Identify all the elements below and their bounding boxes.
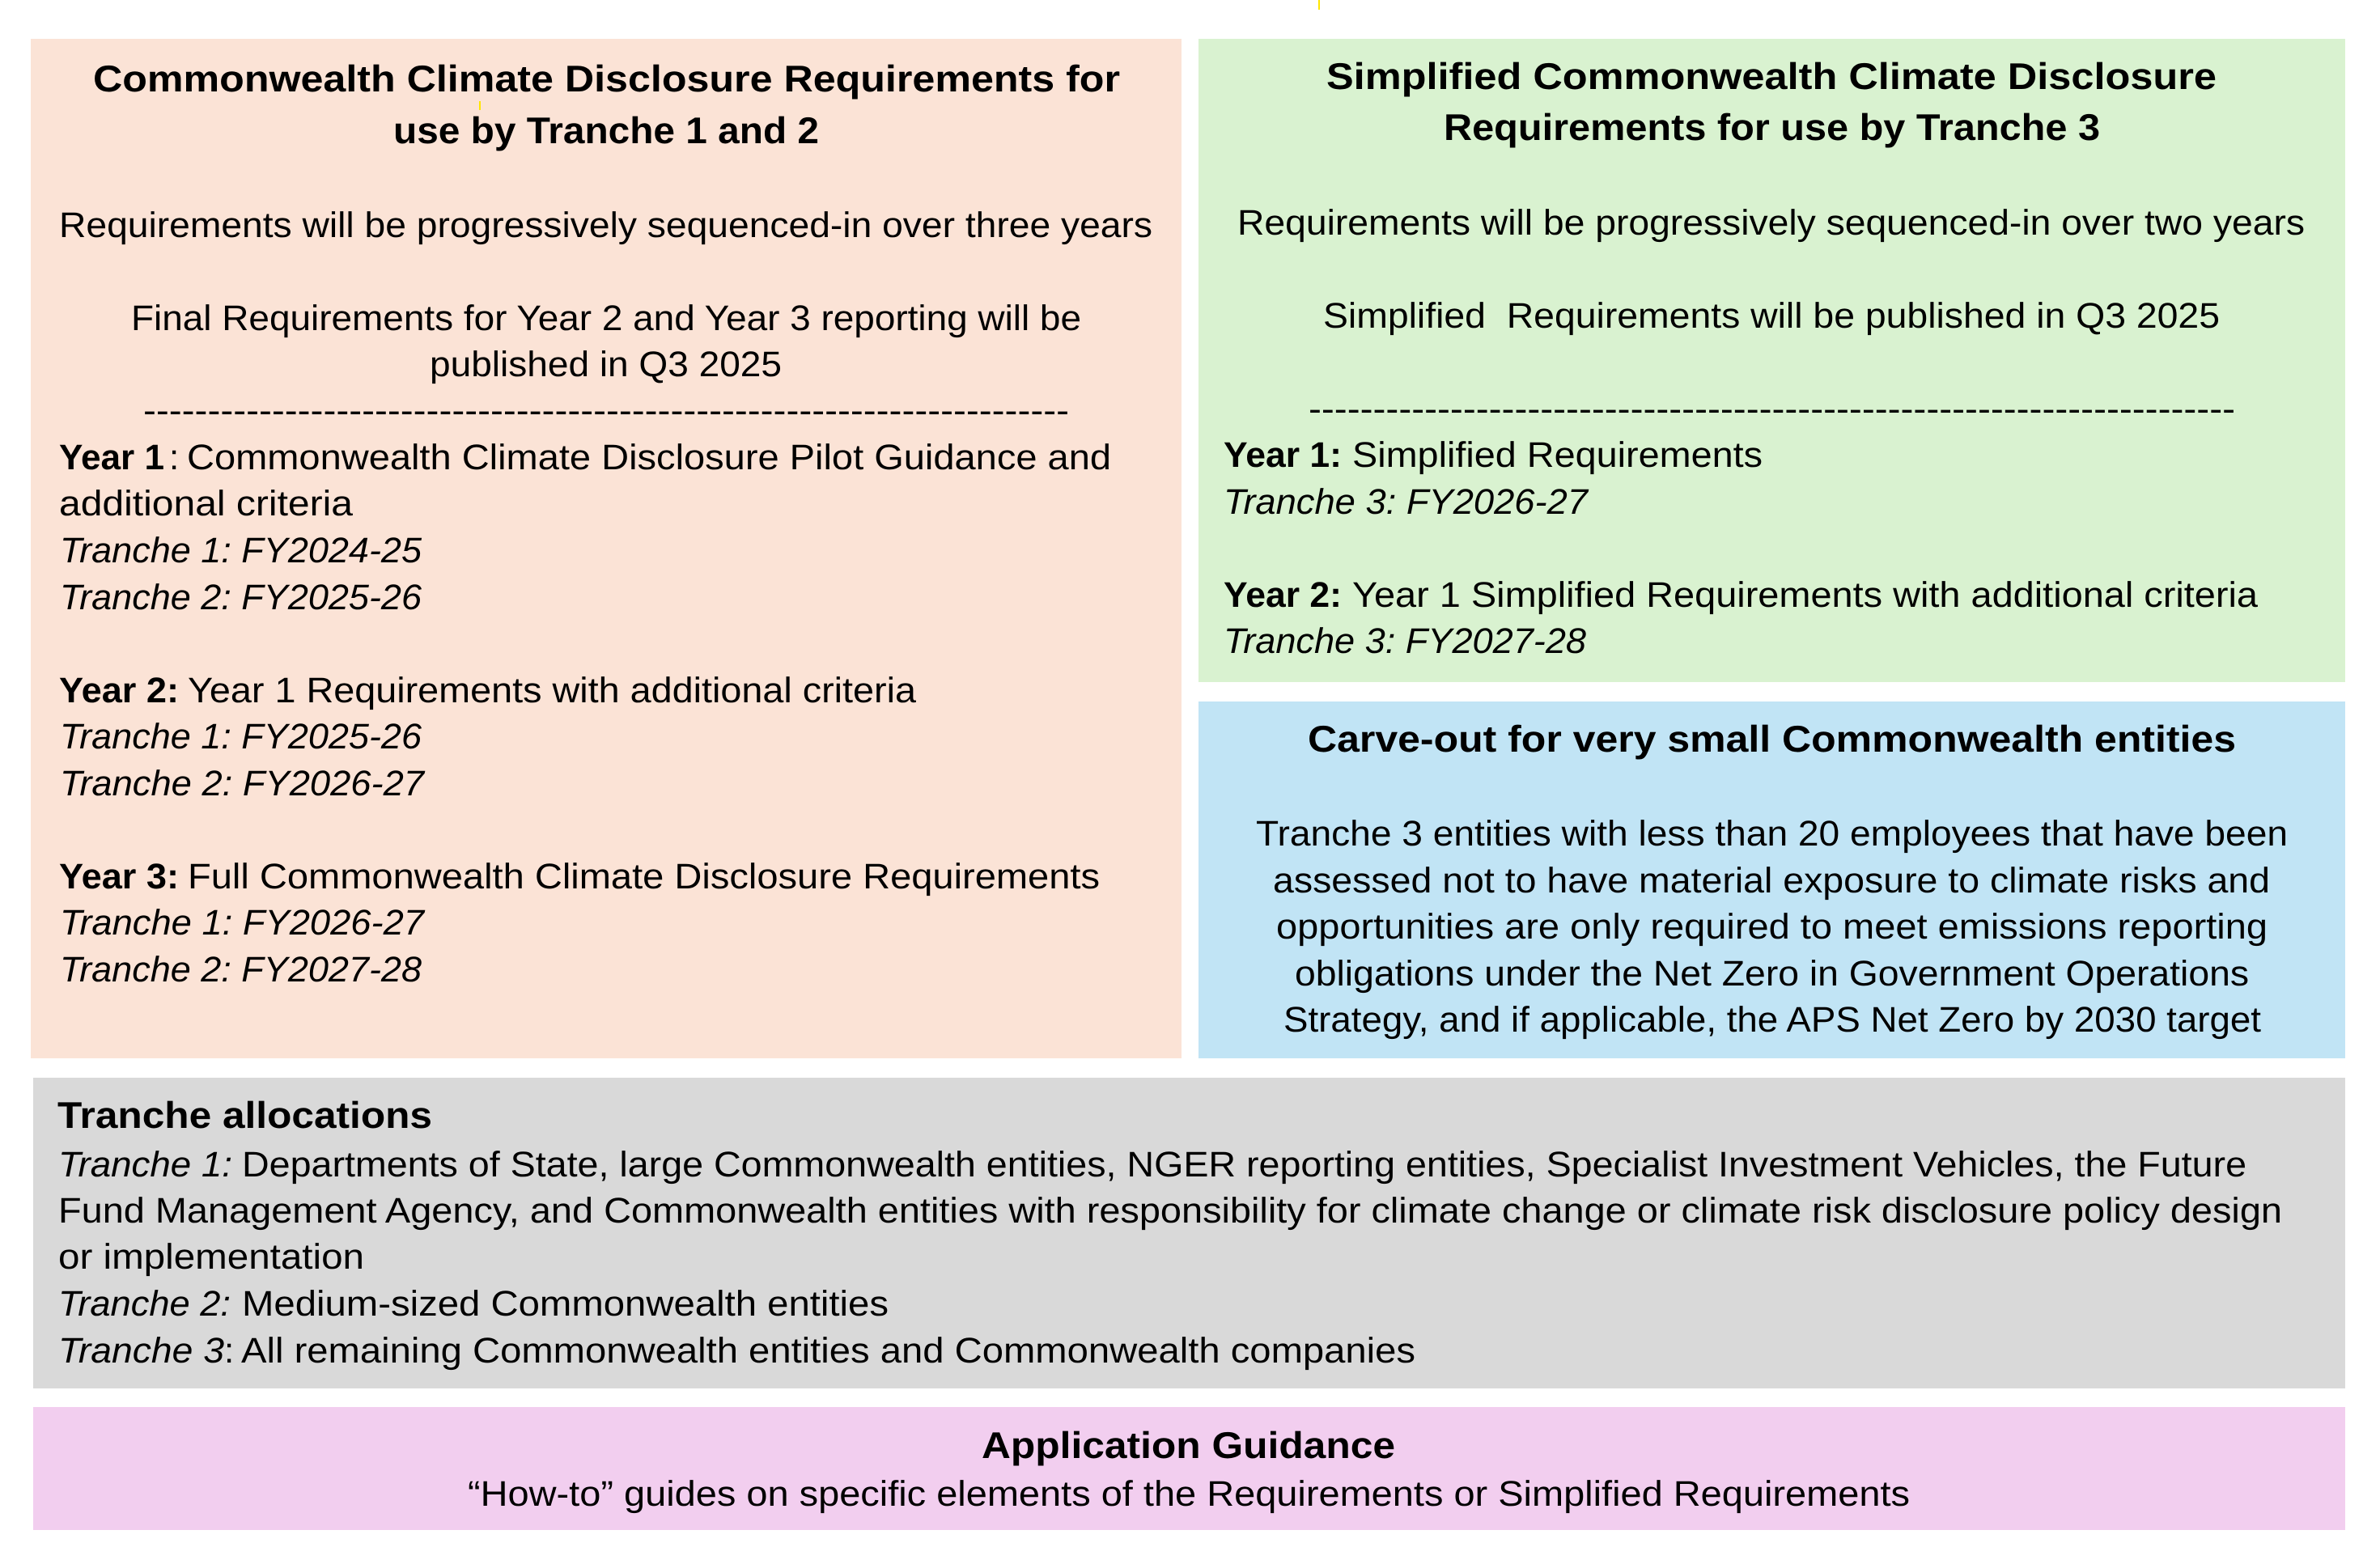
text: Tranche 3 allocation: All remaining Commonwealth entities and Commonwealth companies — [241, 1331, 1415, 1371]
text: Year 1 requirements: additional criteria — [59, 484, 354, 523]
text: Year 2 simplified requirements: Tranche 3: FY2027-28 — [1224, 621, 1587, 661]
text: publication of final requirements — [131, 299, 1081, 384]
text: Year 1 requirements: Year 1 — [59, 438, 164, 477]
text: Year 1 requirements: Tranche 1: FY2024-25 — [60, 531, 422, 570]
heading: Tranche allocations: Tranche allocations — [57, 1094, 432, 1136]
text: carve-out description: Tranche 3 entities with less than 20 employees that have been — [1256, 814, 2288, 854]
text: Year 1 requirements: Commonwealth Climate Disclosure Pilot Guidance and — [187, 438, 1111, 477]
text: Year 1 requirements — [59, 438, 1111, 617]
text: Year 3 requirements: Tranche 2: FY2027-28 — [60, 950, 422, 990]
heading: Tranche 1 and 2 requirements: use by Tranche 1 and 2 — [393, 109, 819, 151]
text: carve-out description: assessed not to have material exposure to climate risks and — [1273, 861, 2270, 901]
text: Tranche 1 allocation: Fund Management Agency, and Commonwealth entities with responsibility for climate change or climate risk disclosure policy design — [58, 1191, 2282, 1231]
heading: Simplified requirements — [1326, 55, 2217, 148]
heading: Simplified requirements: Requirements for use by Tranche 3 — [1444, 106, 2100, 148]
text: publication of final requirements: published in Q3 2025 — [430, 345, 782, 384]
text: carve-out description: obligations under the Net Zero in Government Operations — [1295, 954, 2249, 994]
panel: Commonwealth requirements for Tranche 1 and 2 — [31, 39, 1182, 1058]
text: Year 3 requirements: Full Commonwealth Climate Disclosure Requirements — [188, 857, 1100, 896]
panel: Simplified requirements for Tranche 3 — [1198, 39, 2345, 682]
heading: Application Guidance: Application Guidance — [982, 1424, 1395, 1466]
panel: Carve-out for very small entities — [1198, 701, 2345, 1058]
text: Year 1 simplified requirements: Simplified Requirements — [1352, 435, 1763, 475]
text: Year 1 simplified requirements: Tranche 3: FY2026-27 — [1224, 482, 1589, 522]
panel: Application Guidance — [33, 1407, 2345, 1530]
text: Year 3 requirements — [59, 857, 1100, 990]
text: carve-out description — [1256, 814, 2288, 1040]
text: sequencing over three years: Requirements will be progressively sequenced-in over three years — [59, 206, 1152, 245]
text: Year 1 requirements: Tranche 2: FY2025-26 — [60, 578, 422, 617]
text: Year 2 requirements — [59, 671, 917, 803]
text: Tranche 1 allocation — [58, 1145, 2282, 1277]
text: Year 3 requirements: Year 3: — [59, 857, 179, 896]
heading: Simplified requirements: Simplified Commonwealth Climate Disclosure — [1326, 55, 2217, 97]
text: dashed separator: ------------------------------------------------------------------------ — [1309, 389, 2235, 429]
text: Tranche 1 allocation: or implementation — [58, 1237, 364, 1277]
text: Year 2 requirements: Year 2: — [59, 671, 179, 710]
text: carve-out description: opportunities are only required to meet emissions reporting — [1276, 907, 2268, 947]
text: Year 2 requirements: Tranche 1: FY2025-26 — [60, 717, 422, 757]
text: Tranche 2 allocation: Medium-sized Commonwealth entities — [242, 1284, 889, 1324]
heading: Tranche 1 and 2 requirements: Commonwealth Climate Disclosure Requirements for — [93, 57, 1120, 100]
text: Tranche 3 allocation: : — [224, 1331, 234, 1371]
text: dashed separator: ------------------------------------------------------------------------ — [143, 391, 1069, 430]
text: Tranche 1 allocation: Tranche 1: — [58, 1145, 232, 1185]
text: carve-out description: Strategy, and if applicable, the APS Net Zero by 2030 target — [1283, 1000, 2261, 1040]
text: Year 2 simplified requirements: Year 2: — [1224, 575, 1342, 615]
text: Tranche 3 allocation: Tranche 3 — [58, 1331, 225, 1371]
text: Tranche 2 allocation: Tranche 2: — [58, 1284, 231, 1324]
text: Year 2 requirements: Tranche 2: FY2026-27 — [60, 764, 426, 803]
yellow tick: in left heading — [479, 101, 481, 110]
text: Year 1 requirements: : — [169, 438, 179, 477]
text: Tranche 1 allocation: Departments of State, large Commonwealth entities, NGER reporting entities, Specialist Investment Vehicles, the Future — [242, 1145, 2246, 1185]
text: Year 3 requirements: Tranche 1: FY2026-27 — [60, 903, 426, 943]
text: publication of simplified requirements: Simplified Requirements will be published in Q3 2025 — [1323, 296, 2220, 336]
panel: Tranche allocations — [33, 1078, 2345, 1388]
text: Year 1 simplified requirements — [1224, 435, 1763, 522]
yellow tick: top — [1318, 0, 1320, 10]
text: sequencing over two years: Requirements will be progressively sequenced-in over two years — [1237, 203, 2305, 243]
text: Year 2 requirements: Year 1 Requirements with additional criteria — [188, 671, 917, 710]
text: publication of final requirements: Final Requirements for Year 2 and Year 3 reporting will be — [131, 299, 1081, 338]
heading: Carve-out: Carve-out for very small Commonwealth entities — [1308, 718, 2236, 760]
heading: Tranche 1 and 2 requirements — [93, 57, 1120, 151]
text: Year 2 simplified requirements: Year 1 Simplified Requirements with additional criteria — [1352, 575, 2259, 615]
text: how-to guides: “How-to” guides on specific elements of the Requirements or Simplified Requirements — [468, 1474, 1910, 1514]
text: Year 2 simplified requirements — [1224, 575, 2259, 661]
text: Year 1 simplified requirements: Year 1: — [1224, 435, 1342, 475]
